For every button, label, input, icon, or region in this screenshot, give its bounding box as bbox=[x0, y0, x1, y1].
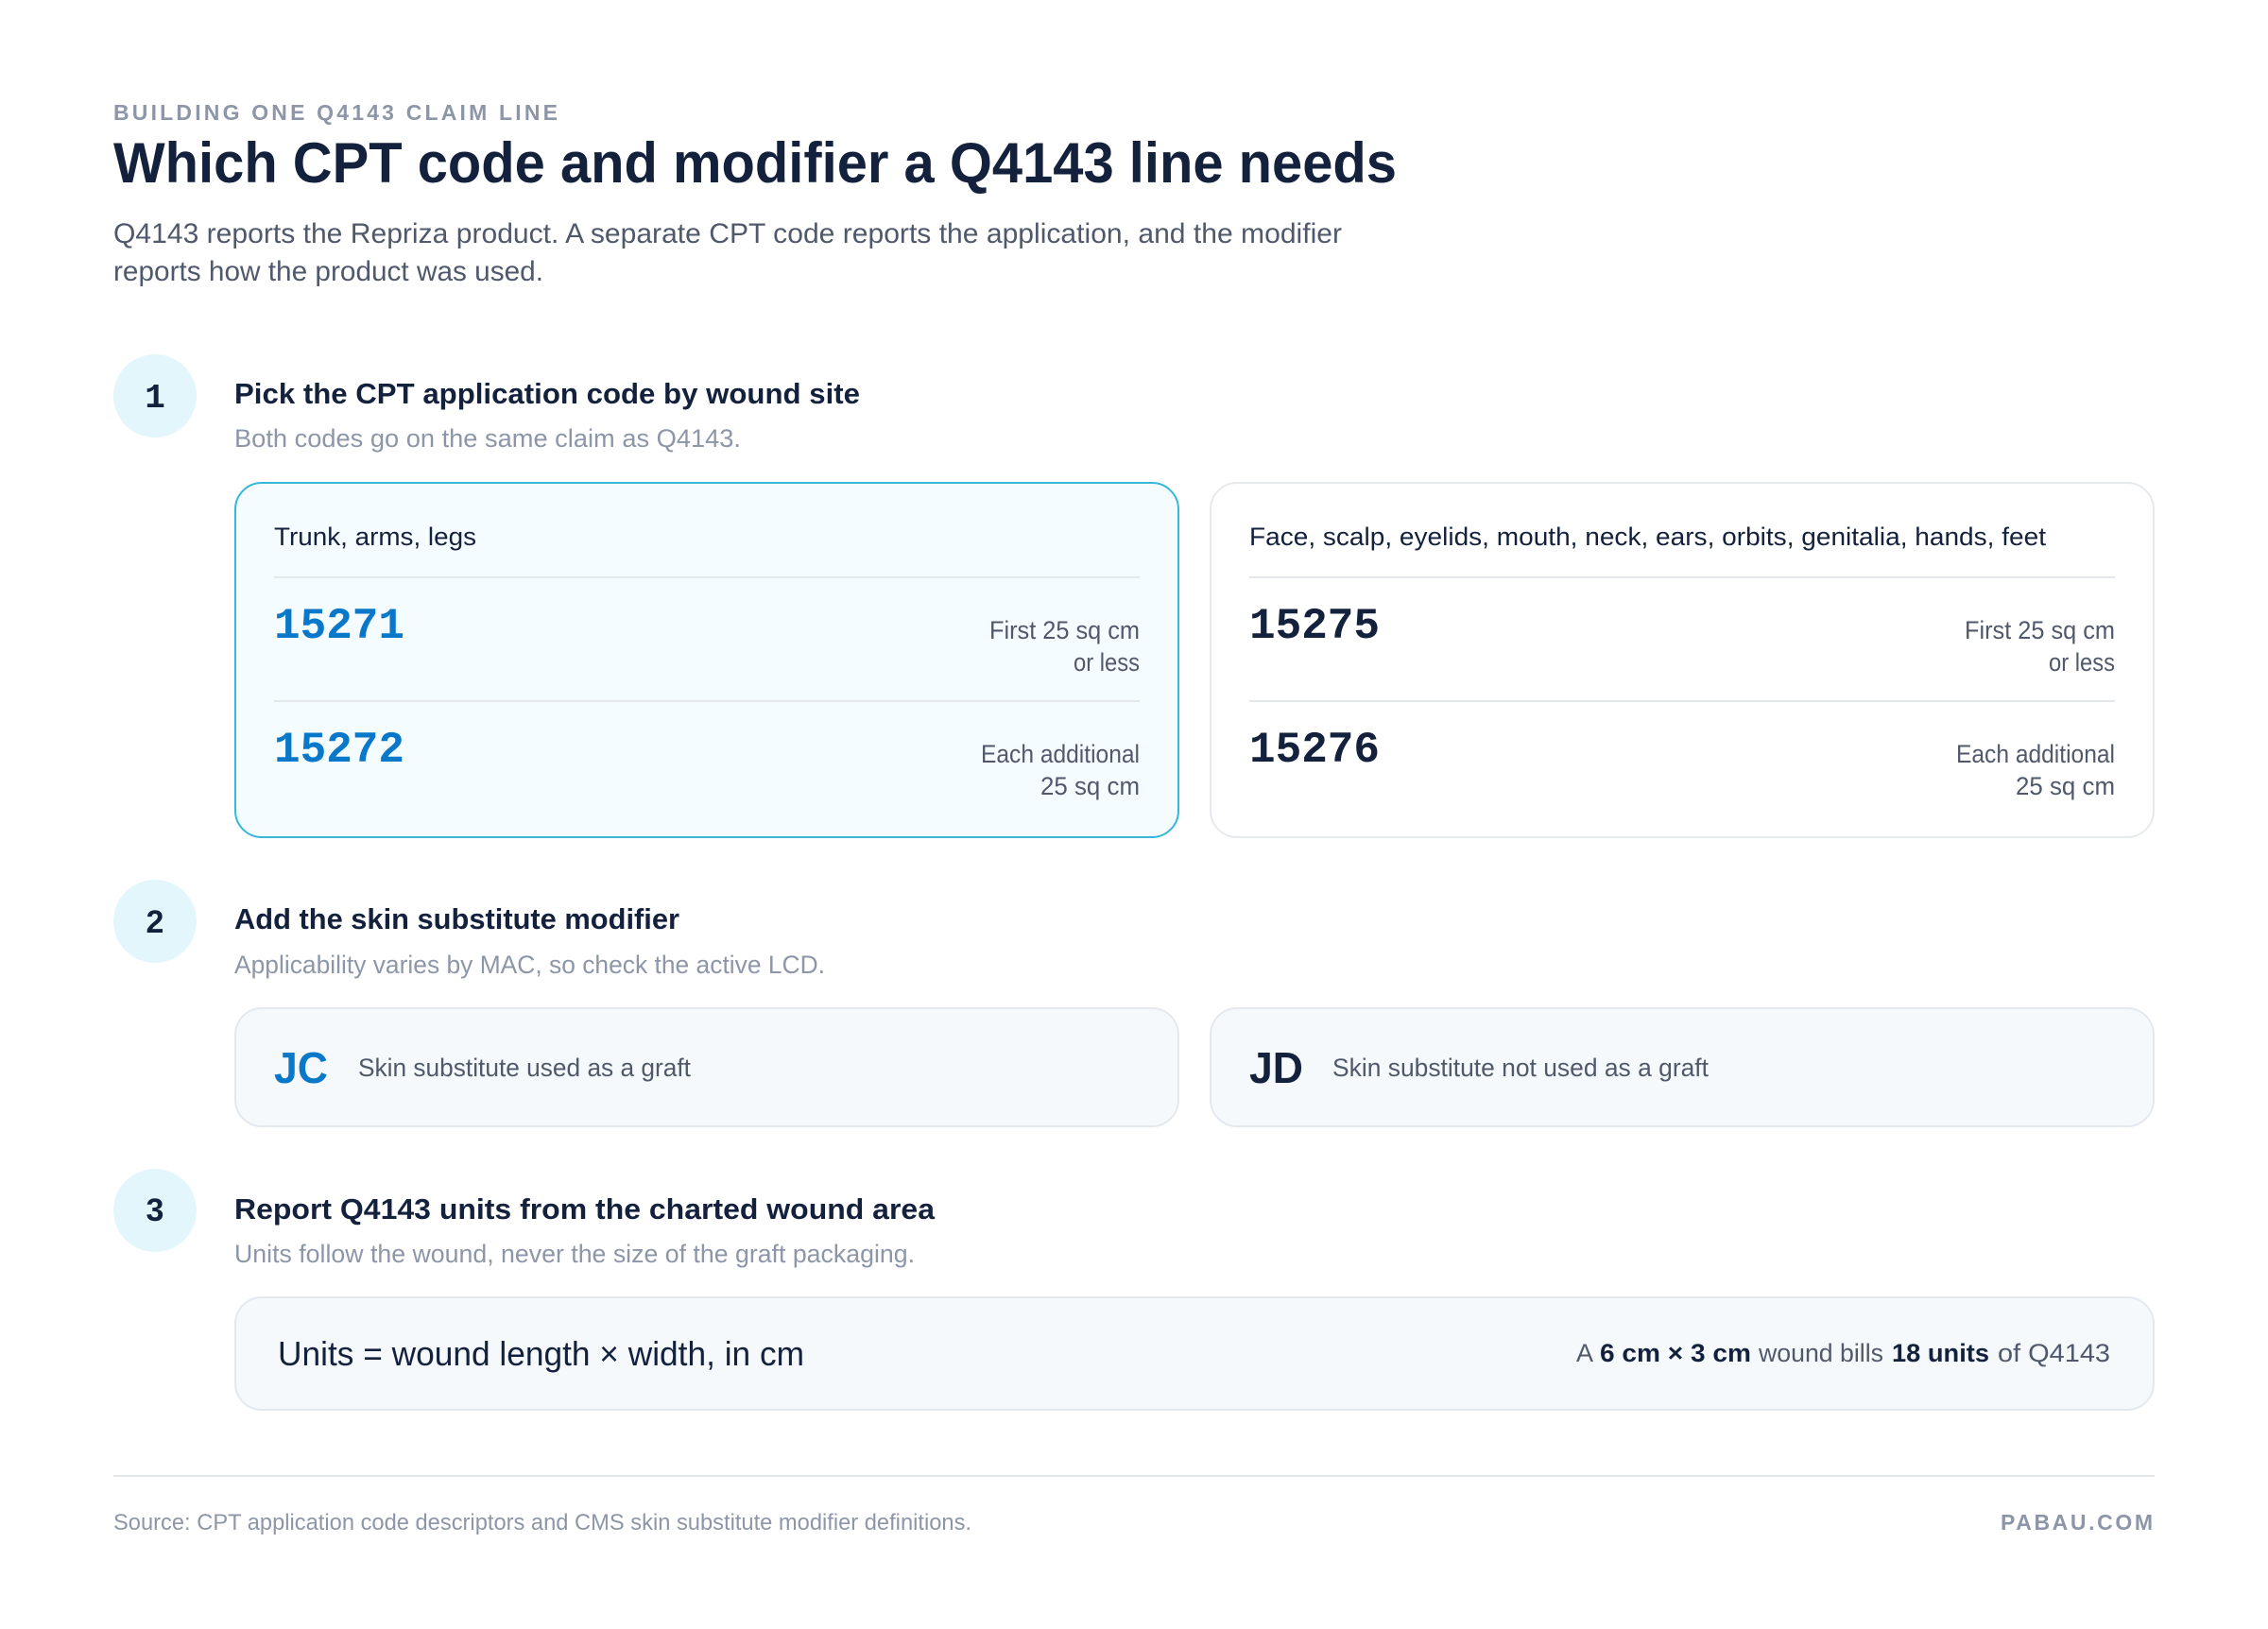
code 15272 description: Each additional bbox=[981, 740, 1140, 768]
header bbox=[113, 100, 1397, 287]
step 3 number badge bbox=[113, 1169, 197, 1252]
worked example: of Q4143 bbox=[1998, 1339, 2110, 1367]
step 3 bbox=[113, 1169, 2154, 1410]
step 3 number badge: 3 bbox=[146, 1192, 163, 1228]
worked example: wound bills bbox=[1758, 1339, 1883, 1367]
code 15275 description: First 25 sq cm bbox=[1965, 616, 2115, 644]
panel: face, scalp and other sites bbox=[1211, 483, 2154, 837]
panel: JD modifier bbox=[1211, 1008, 2154, 1126]
panel heading: Face, scalp, eyelids, mouth, neck, ears, orbits, genitalia, hands, feet bbox=[1249, 523, 2047, 551]
code 15272: 15272 bbox=[274, 726, 404, 775]
panel: trunk, arms, legs bbox=[235, 483, 1178, 837]
code 15271: 15271 bbox=[274, 602, 404, 651]
title: Which CPT code and modifier a Q4143 line needs bbox=[113, 131, 1397, 195]
brand: PABAU.COM bbox=[2001, 1510, 2153, 1535]
step 2 number badge bbox=[113, 880, 197, 963]
worked example: 18 units bbox=[1892, 1339, 1989, 1367]
step 2 heading: Add the skin substitute modifier bbox=[234, 902, 679, 935]
formula: Units = wound length × width, in cm bbox=[278, 1334, 804, 1373]
step 1 number badge: 1 bbox=[145, 379, 165, 418]
code 15271 description: or less bbox=[1074, 648, 1140, 677]
step 1 heading: Pick the CPT application code by wound site bbox=[234, 377, 860, 410]
source note: Source: CPT application code descriptors and CMS skin substitute modifier definitions. bbox=[113, 1510, 971, 1535]
panel heading: Trunk, arms, legs bbox=[274, 523, 476, 551]
code 15276: 15276 bbox=[1249, 726, 1380, 775]
code 15276 description: 25 sq cm bbox=[2016, 772, 2115, 800]
code 15272 description: 25 sq cm bbox=[1040, 772, 1140, 800]
eyebrow: BUILDING ONE Q4143 CLAIM LINE bbox=[113, 100, 558, 125]
step 2 number badge: 2 bbox=[146, 904, 163, 940]
code 15275 description: or less bbox=[2049, 648, 2115, 677]
intro text: Q4143 reports the Repriza product. A separate CPT code reports the application, and the modifier bbox=[113, 218, 1342, 249]
worked example: 6 cm × 3 cm bbox=[1600, 1339, 1751, 1367]
step 2 bbox=[113, 880, 2154, 1126]
code 15275: 15275 bbox=[1249, 602, 1380, 651]
code 15276 description: Each additional bbox=[1956, 740, 2115, 768]
step 1 number badge bbox=[113, 354, 197, 437]
worked example bbox=[1576, 1339, 2110, 1367]
JC description: Skin substitute used as a graft bbox=[358, 1054, 691, 1082]
JC code: JC bbox=[274, 1043, 328, 1092]
code 15271 description: First 25 sq cm bbox=[989, 616, 1140, 644]
panel: JC modifier bbox=[235, 1008, 1178, 1126]
worked example: A bbox=[1576, 1339, 1593, 1367]
intro text: reports how the product was used. bbox=[113, 256, 543, 287]
step 2 note: Applicability varies by MAC, so check the active LCD. bbox=[234, 951, 825, 979]
step 3 heading: Report Q4143 units from the charted wound area bbox=[234, 1192, 936, 1226]
step 3 note: Units follow the wound, never the size of the graft packaging. bbox=[234, 1240, 915, 1268]
JD code: JD bbox=[1249, 1043, 1303, 1092]
panel: units formula bbox=[235, 1297, 2154, 1410]
step 1 bbox=[113, 354, 2154, 837]
JD description: Skin substitute not used as a graft bbox=[1332, 1054, 1709, 1082]
step 1 note: Both codes go on the same claim as Q4143. bbox=[234, 424, 741, 453]
